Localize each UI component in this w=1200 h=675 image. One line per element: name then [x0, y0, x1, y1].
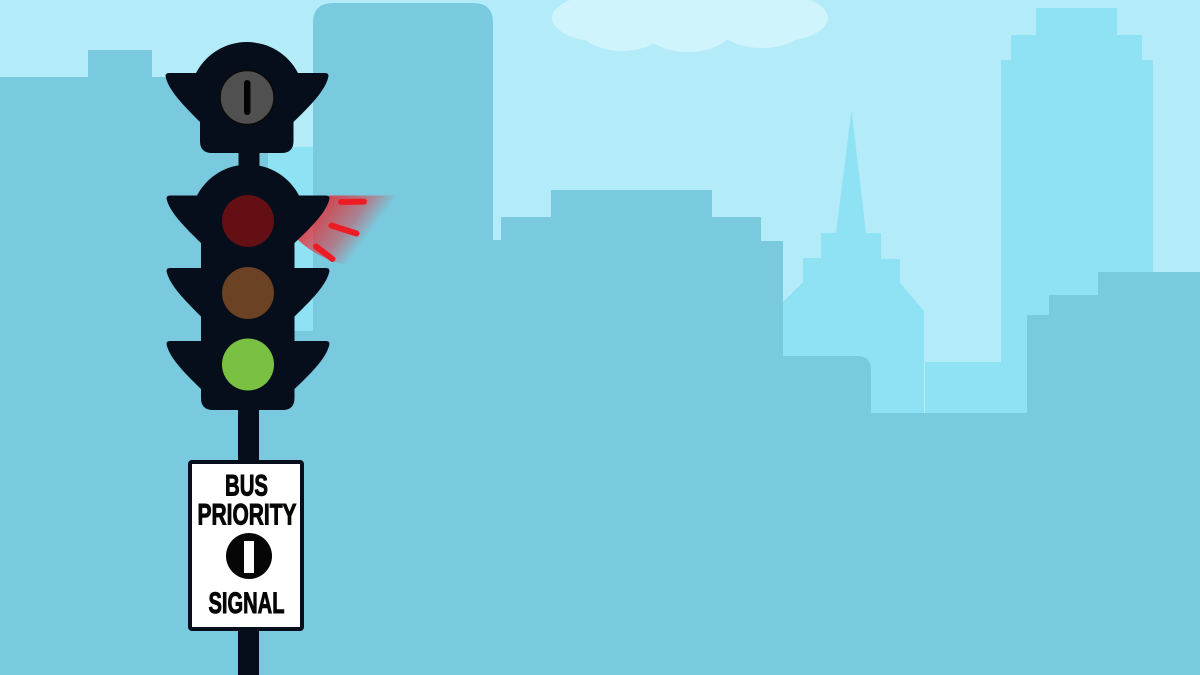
building: low block — [925, 362, 1015, 422]
cloud — [552, 0, 828, 52]
sign text: signal: SIGNAL — [208, 587, 284, 620]
background skyline: pale buildings — [262, 8, 1153, 422]
head housing — [166, 42, 328, 153]
bus signal head — [166, 42, 328, 153]
traffic signal — [166, 42, 330, 675]
grey lens — [220, 70, 274, 124]
sign text: priority: PRIORITY — [198, 498, 296, 532]
red lens — [222, 195, 274, 247]
building: tall rounded tower — [313, 3, 493, 300]
main housing — [166, 165, 330, 410]
pole connector — [238, 150, 260, 175]
signal pole — [238, 400, 259, 675]
glow rays — [316, 202, 364, 259]
amber lens — [222, 267, 274, 319]
vertical bar symbol — [244, 80, 250, 115]
sign text: bus: BUS — [225, 470, 268, 502]
green lens — [222, 338, 274, 390]
building: tall stepped tower — [1001, 8, 1153, 420]
building: left stepped block — [0, 50, 330, 675]
bus priority sign — [190, 462, 302, 629]
building: church spire — [775, 110, 924, 413]
glow wedge — [298, 196, 398, 265]
building: small block behind signal — [262, 147, 322, 331]
building: wide stepped city block — [313, 190, 1200, 675]
red light glow — [298, 196, 398, 265]
sign plate — [190, 462, 302, 629]
sign symbol — [226, 533, 272, 579]
main signal head — [166, 165, 330, 410]
